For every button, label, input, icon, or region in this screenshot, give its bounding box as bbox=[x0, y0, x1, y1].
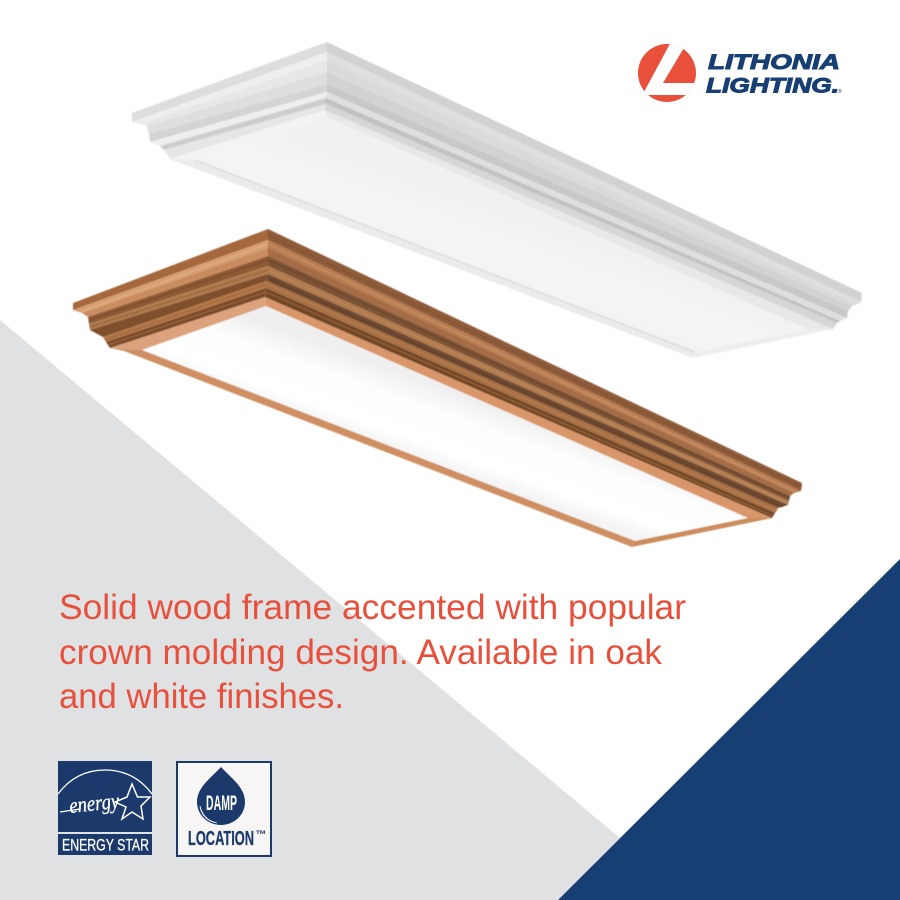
white fixture short molding bbox=[132, 42, 327, 159]
badge divider bbox=[58, 832, 152, 834]
logo: Lithonia Lighting bbox=[638, 40, 842, 102]
energy arc bbox=[58, 770, 152, 794]
oak fixture long molding with grain bbox=[265, 229, 802, 518]
logo mark: red circle with white L bbox=[638, 44, 696, 102]
product: white crown molding fixture bbox=[132, 42, 862, 358]
water drop icon bbox=[197, 767, 245, 825]
logo wordmark: LITHONIA bbox=[708, 50, 840, 74]
description text: and white finishes. bbox=[59, 677, 344, 716]
white fixture long molding bbox=[325, 42, 862, 329]
logo wordmark: LIGHTING. bbox=[706, 74, 839, 98]
LOCATION label: LOCATION bbox=[188, 827, 254, 850]
energy star outline bbox=[115, 784, 150, 819]
badge: DAMP LOCATION bbox=[177, 762, 271, 856]
description text bbox=[59, 588, 686, 716]
logo wordmark bbox=[706, 50, 840, 98]
drop highlight crescent bbox=[200, 806, 217, 823]
oak fixture short molding with grain bbox=[73, 229, 268, 348]
energy script swash bbox=[60, 809, 80, 812]
energy star label: ENERGY STAR bbox=[62, 836, 149, 854]
oak fixture frame bbox=[110, 297, 772, 547]
background: navy triangle bbox=[558, 559, 900, 900]
badge: ENERGY STAR bbox=[58, 761, 152, 855]
product: oak crown molding fixture bbox=[73, 229, 802, 547]
energy script: energy bbox=[68, 788, 120, 818]
white fixture frame bbox=[170, 110, 833, 358]
badge: DAMP LOCATION: DAMP bbox=[206, 791, 237, 815]
oak fixture lens panel bbox=[142, 306, 748, 541]
description text: crown molding design. Available in oak bbox=[59, 633, 662, 672]
description text: Solid wood frame accented with popular bbox=[59, 588, 686, 627]
white fixture lens panel bbox=[195, 117, 808, 352]
logo registered mark: ® bbox=[838, 88, 842, 95]
background: grey triangle bbox=[0, 320, 620, 900]
trademark: ™ bbox=[256, 829, 266, 841]
